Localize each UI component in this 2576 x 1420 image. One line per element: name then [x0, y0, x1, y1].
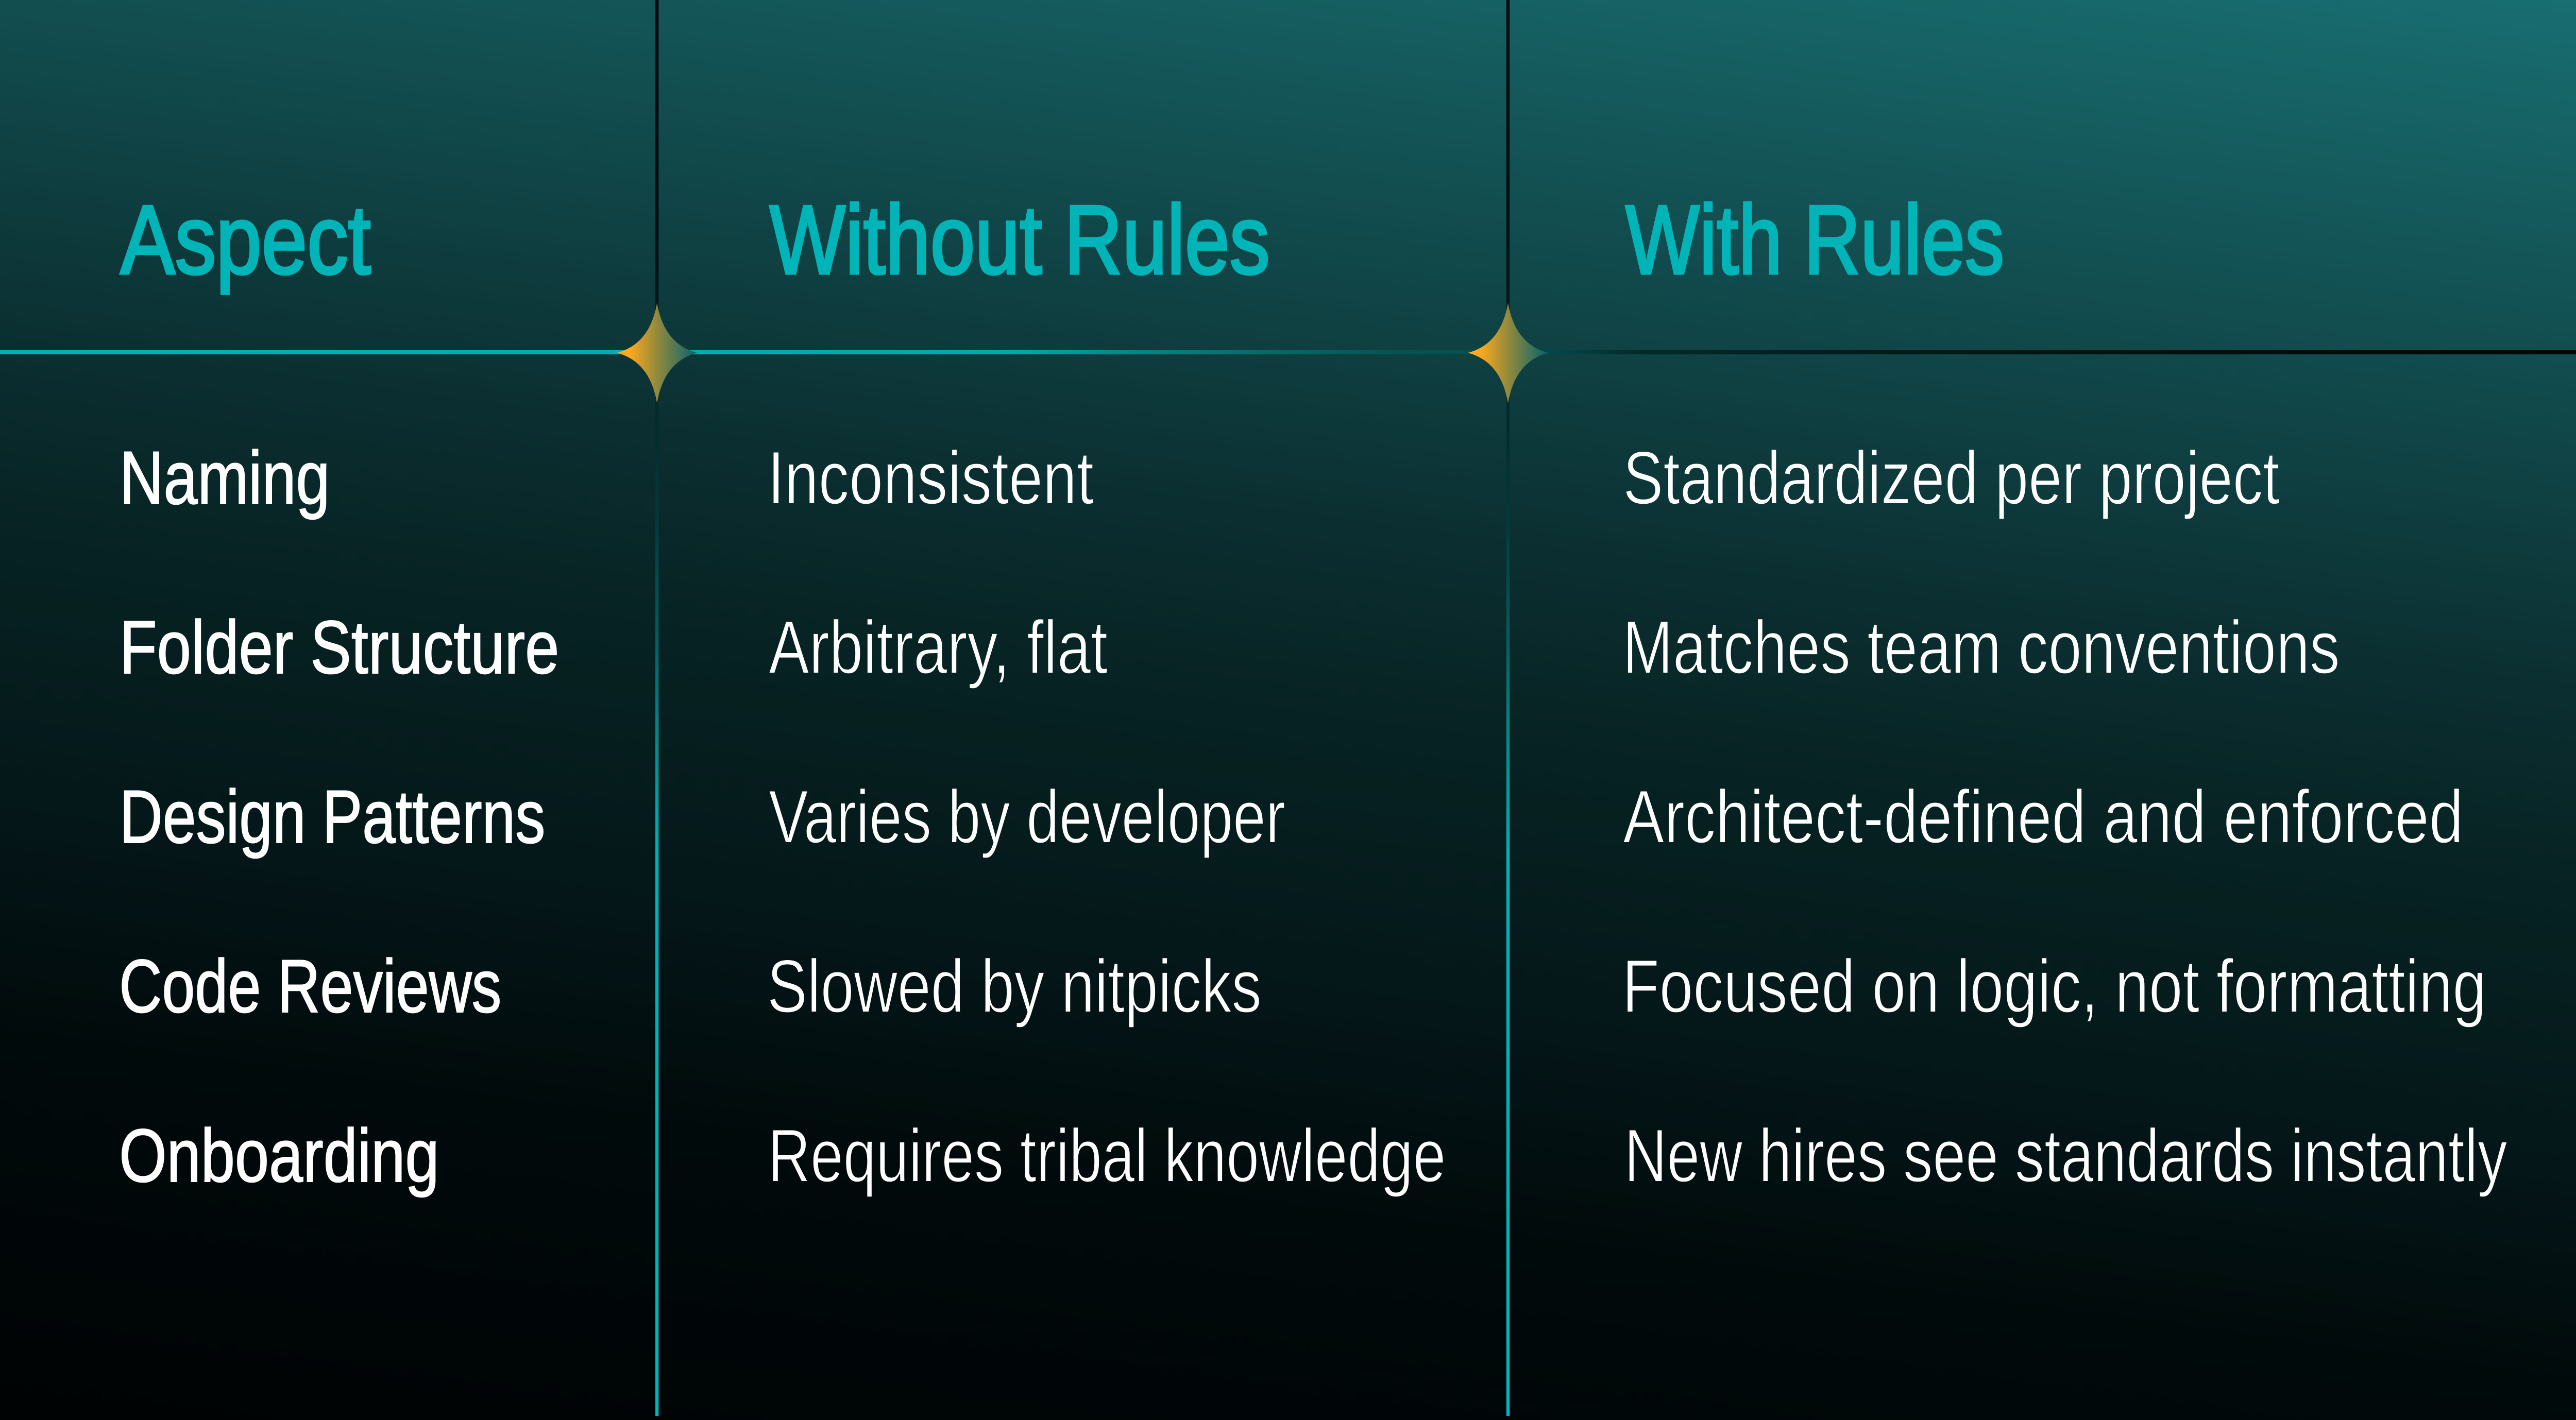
column divider 1 — [655, 0, 658, 1416]
text: Requires tribal knowledge: Requires tribal knowledge — [768, 1114, 1446, 1197]
heading: Without Rules: Without Rules — [770, 185, 1270, 295]
header divider — [0, 350, 2576, 354]
label: Naming: Naming — [120, 436, 330, 520]
text: Varies by developer: Varies by developer — [769, 775, 1285, 859]
heading: With Rules: With Rules — [1625, 185, 2004, 295]
label: Folder Structure: Folder Structure — [120, 605, 559, 689]
text: Architect-defined and enforced: Architect-defined and enforced — [1623, 775, 2464, 859]
label: Design Patterns: Design Patterns — [120, 775, 545, 859]
icon: four-point star 1 — [617, 303, 697, 403]
text: Matches team conventions: Matches team conventions — [1623, 605, 2340, 689]
column: with rules — [1622, 436, 2507, 1197]
label: Onboarding: Onboarding — [119, 1114, 439, 1197]
column: aspect labels — [119, 436, 559, 1197]
text: New hires see standards instantly: New hires see standards instantly — [1624, 1114, 2507, 1197]
text: Arbitrary, flat: Arbitrary, flat — [769, 605, 1108, 689]
label: Code Reviews: Code Reviews — [119, 944, 501, 1028]
column: without rules — [767, 436, 1446, 1197]
heading: Aspect: Aspect — [121, 185, 371, 295]
column divider 2 — [1506, 0, 1510, 1416]
text: Slowed by nitpicks: Slowed by nitpicks — [767, 944, 1262, 1028]
text: Focused on logic, not formatting: Focused on logic, not formatting — [1622, 944, 2486, 1028]
text: Inconsistent: Inconsistent — [768, 436, 1094, 520]
header row — [121, 185, 2004, 295]
icon: four-point star 2 — [1468, 303, 1548, 403]
text: Standardized per project: Standardized per project — [1623, 436, 2280, 520]
